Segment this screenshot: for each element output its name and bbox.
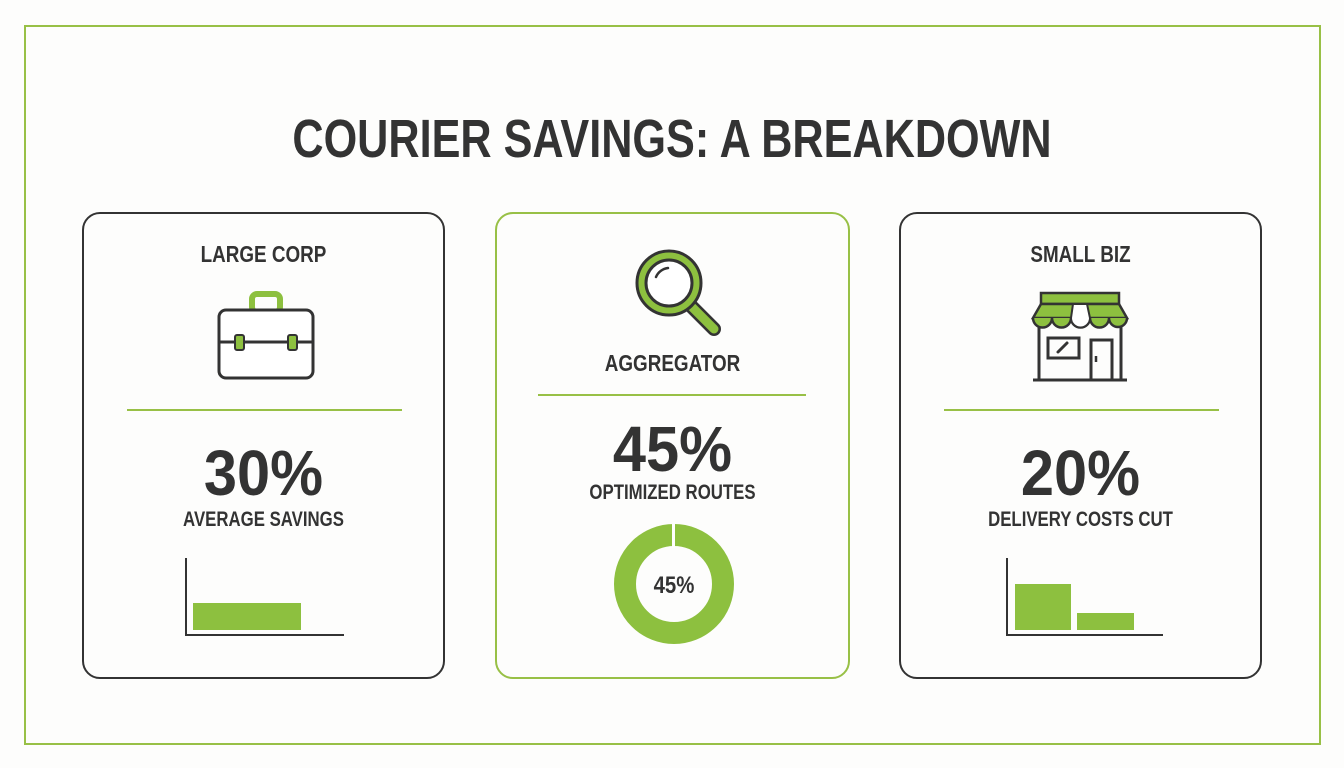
bar chart	[185, 558, 344, 636]
heading: small biz: SMALL BIZ	[1030, 241, 1131, 267]
label: average savings: AVERAGE SAVINGS	[183, 508, 344, 531]
label: delivery costs cut: DELIVERY COSTS CUT	[988, 508, 1173, 531]
panel: small biz	[899, 212, 1262, 679]
heading: aggregator: AGGREGATOR	[605, 350, 740, 376]
bar chart	[1006, 558, 1163, 636]
heading: large corp: LARGE CORP	[201, 241, 326, 267]
stat: 30%: 30%	[204, 437, 323, 509]
panel: large corp	[82, 212, 445, 679]
icon: briefcase	[218, 291, 314, 380]
icon: storefront	[1030, 292, 1130, 382]
icon: magnifier	[636, 250, 721, 336]
donut chart: 45%	[654, 571, 695, 598]
label: optimized routes: OPTIMIZED ROUTES	[589, 481, 756, 504]
panel: aggregator	[495, 212, 850, 679]
stat: 45%: 45%	[613, 413, 732, 485]
title: COURIER SAVINGS: A BREAKDOWN	[292, 109, 1052, 169]
stat: 20%: 20%	[1021, 437, 1140, 509]
donut chart	[614, 524, 734, 644]
